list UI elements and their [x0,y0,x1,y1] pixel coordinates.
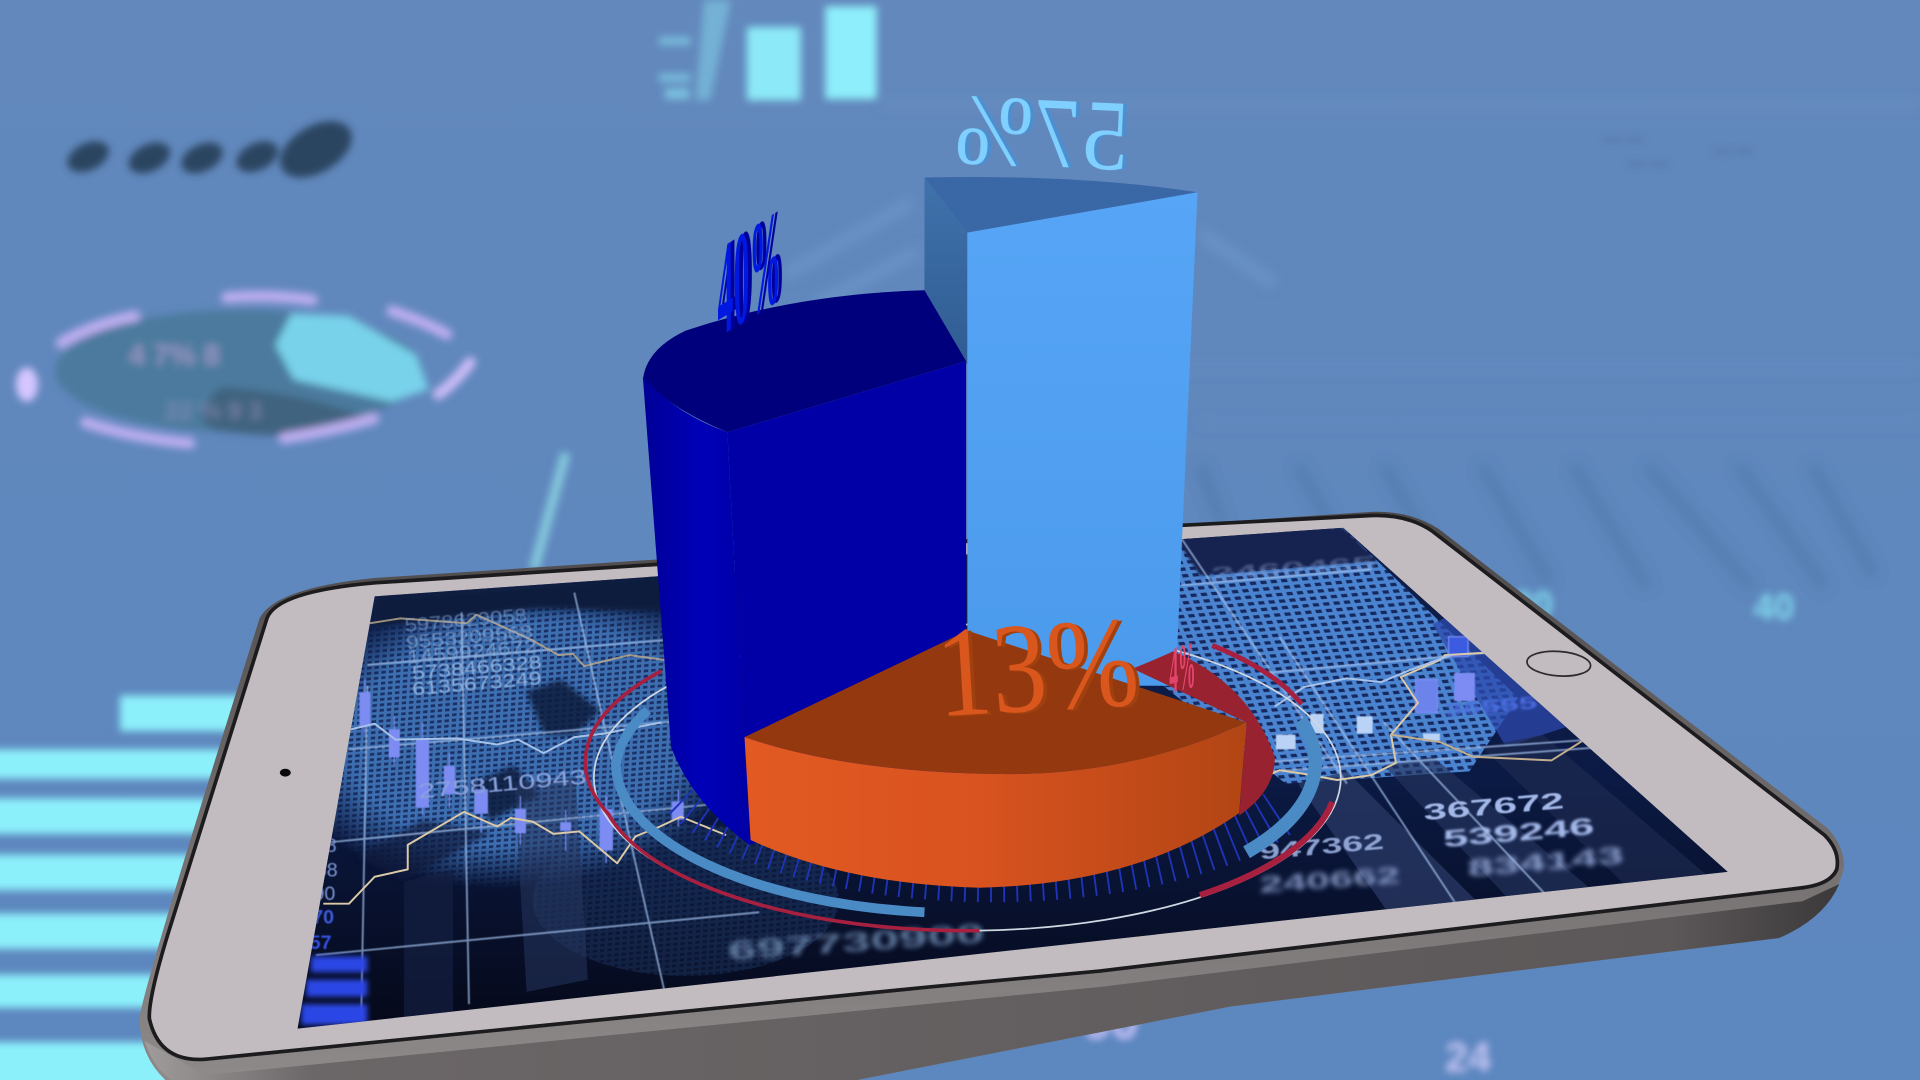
rings: hatched tick ring [585,624,1341,931]
background: blurred labels: — — [1714,141,1754,161]
tablet home button [1526,649,1591,678]
label: 40% edge-on: 40% [721,177,785,366]
screen: numbers left column: 70 [312,906,334,928]
wedge: red small [1133,651,1275,816]
screen: numbers left: 5978629058 [404,604,528,636]
background: blurred labels: — — [1604,128,1644,148]
screen: numbers right [727,552,1625,966]
screen: numbers right: 539246 [1442,813,1595,853]
screen: grid lines [316,539,1604,1016]
screen: globe right [1163,528,1580,784]
background: blurred bar chart at top [659,0,877,100]
background: blurred pie chart: 4 7% 8 [129,339,220,372]
background: faint grid lines [784,104,1920,588]
background: blurred labels: 30 [1512,584,1553,625]
screen: numbers right: 947362 [1258,829,1385,865]
tablet screen [245,520,1739,1035]
screen: numbers left: 2758110943 [417,766,588,803]
screen: numbers right: 240662 [1259,862,1401,898]
screen: numbers left: 9553209568 [405,621,534,653]
background: blurred labels: 40 [1753,587,1794,628]
screen: numbers left: 5738466328 [411,651,542,684]
ring: thick blue arcs [616,710,924,912]
screen: numbers right: 2460465 [1210,552,1376,584]
label: small red percent: 4% [1169,627,1196,708]
screen: numbers left column: 57 [310,932,332,954]
wedge: 57% light blue [924,177,1198,686]
background: blurred labels: 24 [1445,1033,1491,1080]
screen: numbers left column: 8 [326,835,337,857]
label: 13%: 13% [936,590,1146,745]
ring: red arcs [585,671,980,931]
label: 57% mirrored: 57% [957,74,1135,192]
wedge: 40% dark blue [643,290,966,845]
label: 13%: 13% [932,589,1143,744]
label: 57% mirrored: 57% [953,73,1132,192]
screen: numbers left column [312,838,338,950]
screen: numbers left [404,604,588,803]
screen: numbers right: 834143 [1466,842,1625,883]
screen: numbers right: 36555 [1444,692,1539,720]
wedge: 13% orange [744,631,1247,888]
background: diagonal cyan line [534,453,566,569]
background: blurred labels: 90 [1084,995,1138,1049]
3D pie chart [643,73,1275,888]
tablet body edge [140,512,1844,1080]
screen: bright blue bars [301,956,367,1025]
screen: dark column stripes [404,735,1714,1016]
screen: numbers right: 697730900 [727,918,986,966]
background: cyan stripes bar chart [0,696,257,1080]
label: 40% edge-on: 40% [718,180,781,368]
screen: trend lines [323,615,1584,904]
screen: globe left [333,576,838,976]
tablet camera [280,769,291,777]
screen: candlesticks [360,637,1474,863]
background: blurred labels [1084,128,1794,1080]
tablet [140,512,1844,1080]
ring: thin white ellipse [594,624,1341,931]
screen: numbers right: 367672 [1422,787,1565,825]
screen: numbers left column: 90 [313,883,335,905]
background: blurred pie chart: 22 % 9 3 [165,398,262,425]
background: blurred dark icons row [62,110,361,189]
screen: numbers left column: 88 [316,860,338,882]
screen: numbers left: 1459924672 [406,635,537,668]
background: blurred pie chart [16,296,470,443]
screen: pale candlesticks [1276,714,1440,749]
background: blurred labels: — — [1629,153,1668,173]
tablet face [149,515,1837,1059]
screen: numbers left: 6135673249 [411,667,542,699]
